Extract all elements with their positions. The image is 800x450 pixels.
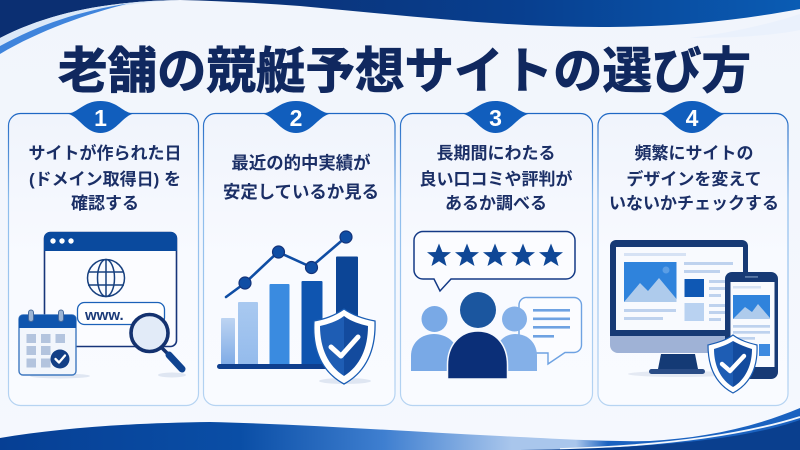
- icon: bar chart with shield: [217, 231, 375, 384]
- card 4 background: [598, 114, 788, 406]
- badge 3: [462, 101, 530, 133]
- panel: step 3: [400, 101, 592, 406]
- panel: step 2: [204, 101, 395, 406]
- icon: browser with calendar and magnifier: www.: [84, 307, 124, 324]
- badge 2: 2: [290, 105, 302, 131]
- text: step 1: サイトが作られた日: [28, 143, 182, 163]
- panel: step 4: [598, 101, 788, 406]
- bottom wave: [0, 408, 800, 450]
- badge 4: [659, 101, 726, 133]
- card 1 background: [8, 114, 198, 406]
- text: step 1: (ドメイン取得日) を: [29, 170, 181, 189]
- text: step 1: 確認する: [71, 194, 139, 213]
- badge 1: [67, 101, 134, 133]
- text: step 4: 頻繁にサイトの: [634, 143, 754, 163]
- text: step 3: あるか調べる: [445, 194, 547, 213]
- badge 2: [262, 101, 331, 133]
- text: step 3: 良い口コミや評判が: [420, 169, 572, 189]
- title: 老舗の競艇予想サイトの選び方: [58, 44, 751, 99]
- badge 1: 1: [94, 105, 107, 131]
- text: step 4: デザインを変えて: [626, 169, 762, 189]
- text: step 2: 最近の的中実績が: [231, 153, 371, 173]
- badge 3: 3: [489, 105, 502, 131]
- icon: monitor, phone and shield: [610, 240, 778, 393]
- badge 4: 4: [686, 105, 699, 131]
- icon: browser with calendar and magnifier: [19, 232, 186, 378]
- text: step 4: いないかチェックする: [609, 194, 779, 213]
- card 3 background: [400, 114, 592, 406]
- card 2 background: [204, 114, 395, 406]
- panel: step 1: [8, 101, 198, 406]
- icon: review bubble and people: [411, 232, 582, 379]
- text: step 3: 長期間にわたる: [436, 144, 556, 163]
- text: step 2: 安定しているか見る: [223, 182, 379, 202]
- header wave: [0, 0, 800, 54]
